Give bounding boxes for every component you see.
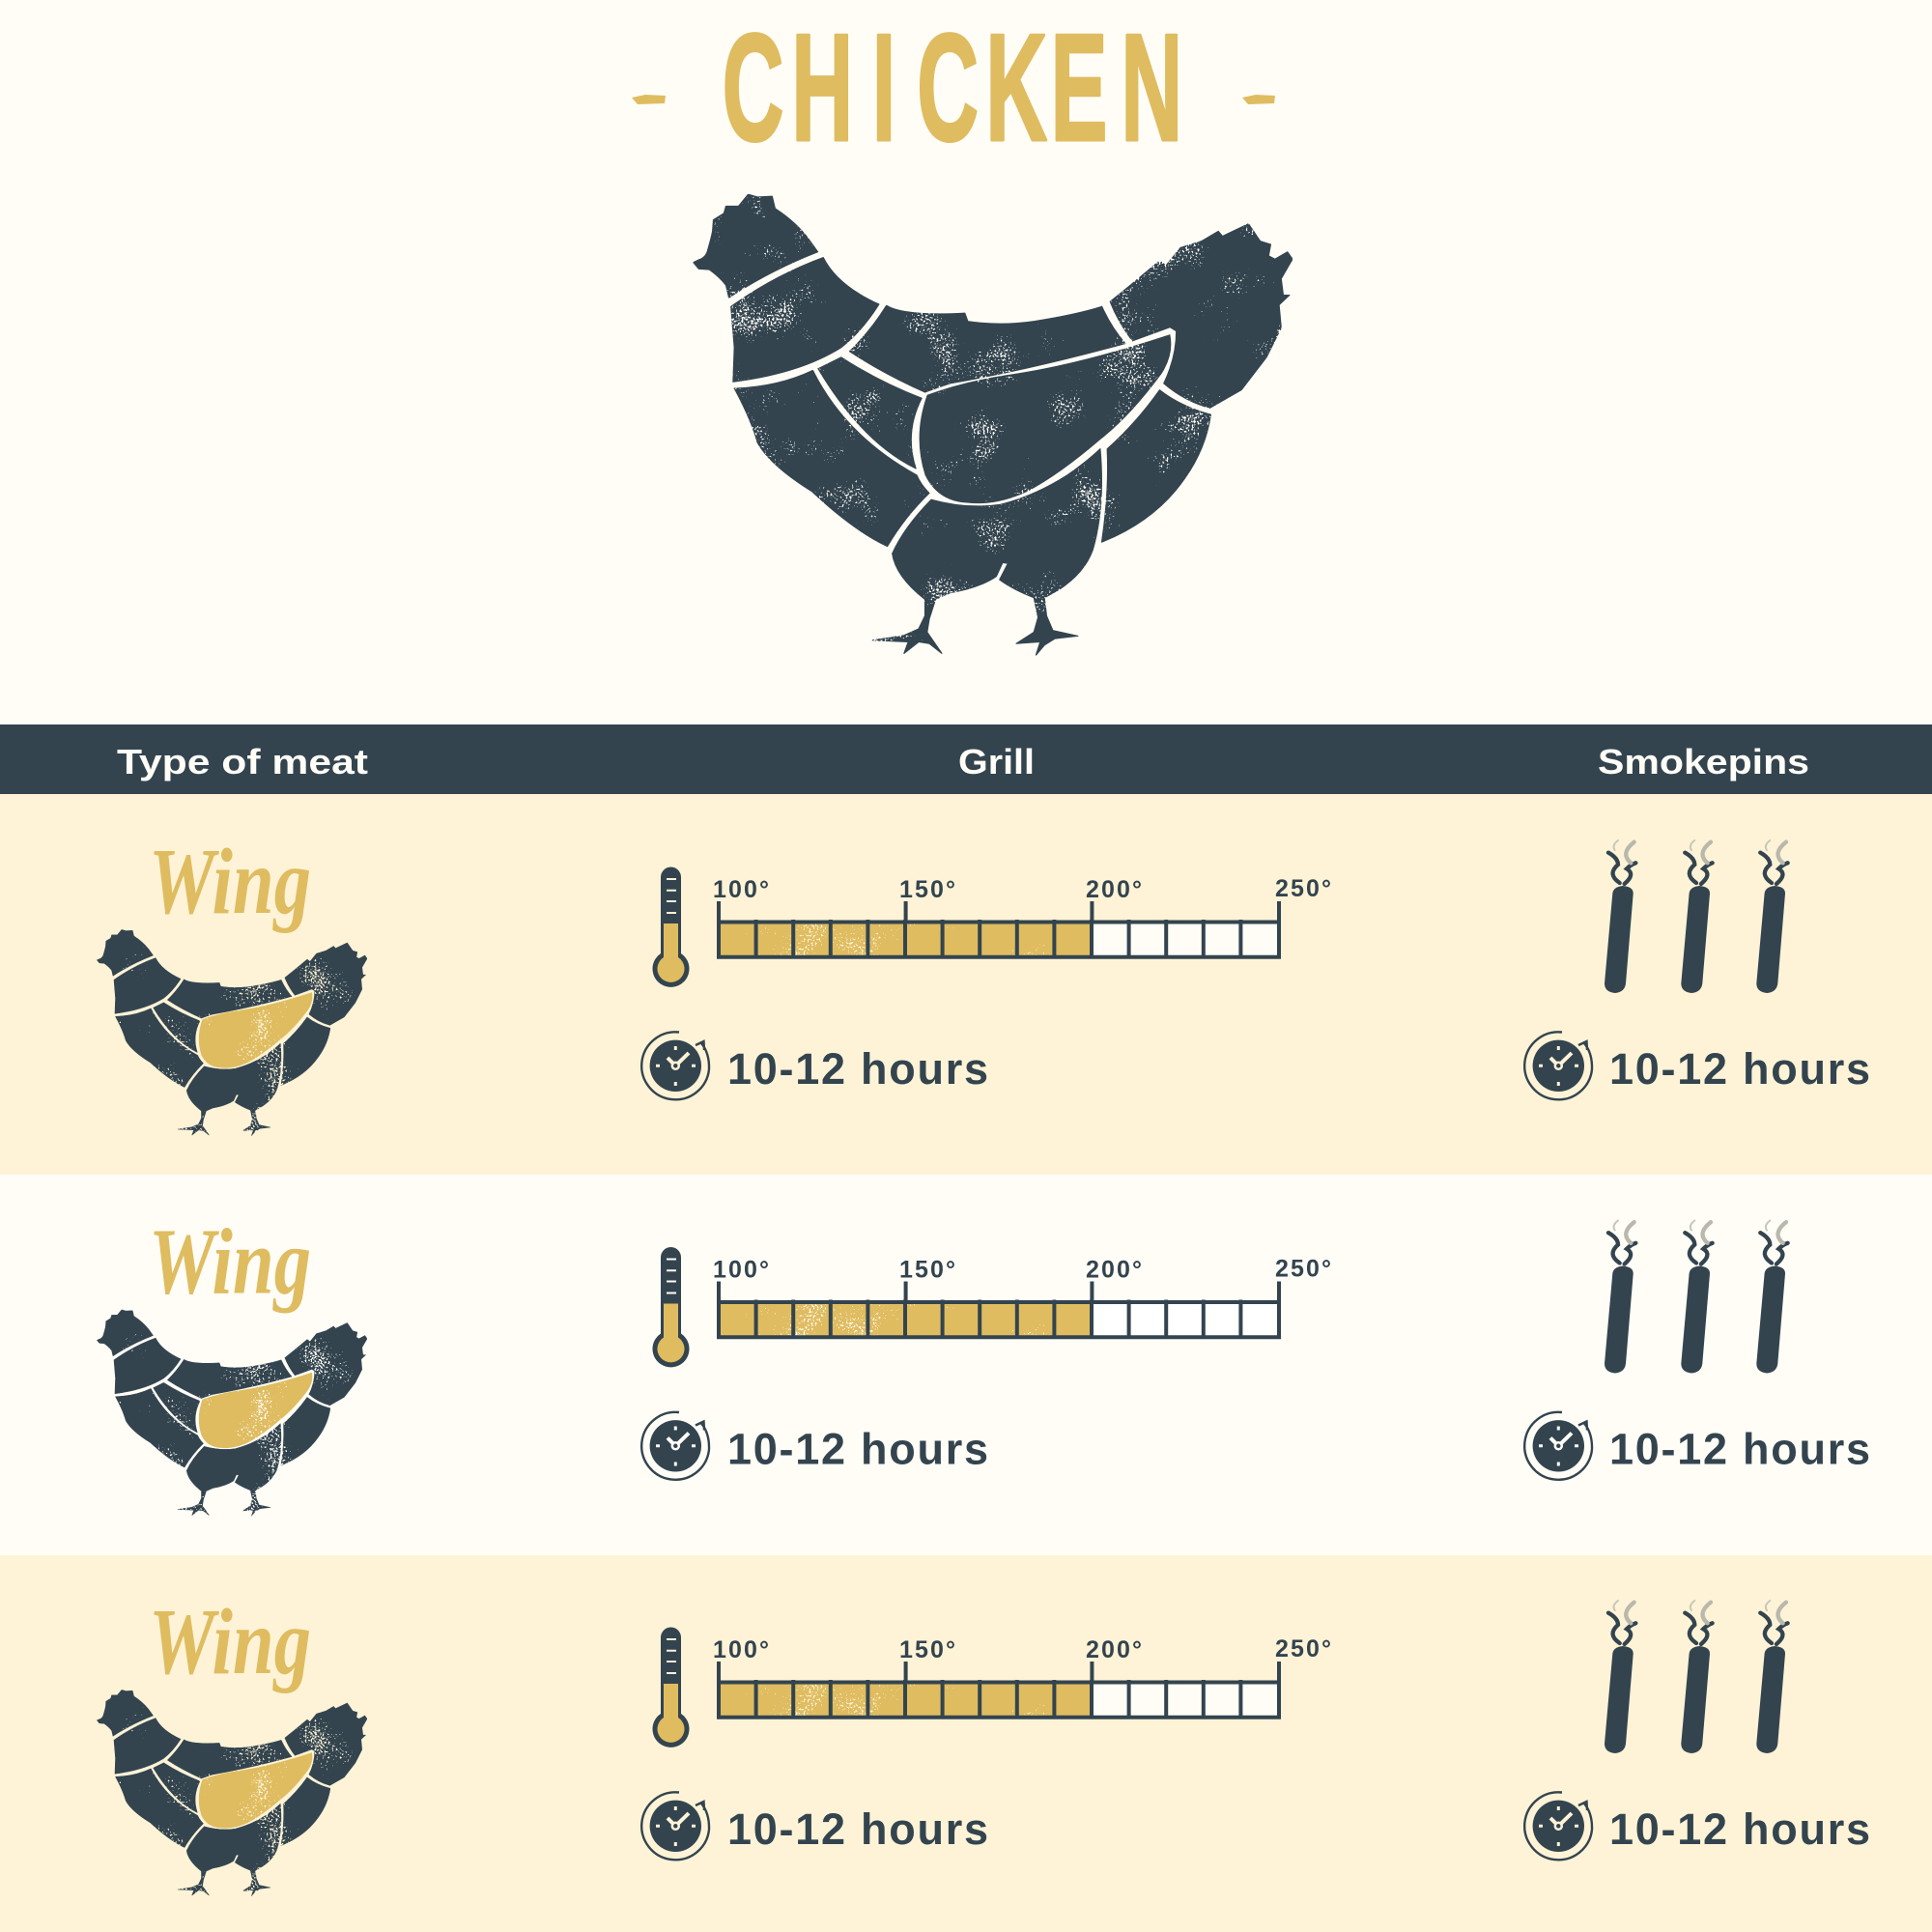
smokepins time: 10-12 hours bbox=[1609, 1804, 1870, 1854]
smokepin 3 bbox=[1756, 1601, 1788, 1753]
chicken with wing highlighted bbox=[97, 1690, 367, 1896]
smokepins time: 10-12 hours bbox=[1609, 1424, 1870, 1474]
chicken with wing highlighted bbox=[97, 1310, 367, 1516]
grill time: 10-12 hours bbox=[727, 1804, 988, 1854]
smokepin 3 bbox=[1756, 840, 1788, 993]
row 2 bbox=[0, 1175, 1932, 1555]
smokepin 1 bbox=[1605, 840, 1635, 993]
grill clock icon bbox=[641, 1412, 709, 1480]
thermometer bbox=[653, 1247, 690, 1367]
smokepin 2 bbox=[1681, 840, 1713, 993]
temperature scale bbox=[713, 1256, 1331, 1337]
scale label 150: 150° bbox=[899, 1256, 955, 1283]
row 3 bbox=[0, 1555, 1932, 1932]
smokepins clock icon bbox=[1524, 1792, 1592, 1860]
grill clock icon bbox=[641, 1792, 709, 1860]
header: type of meat: Type of meat bbox=[117, 742, 368, 781]
header: grill: Grill bbox=[958, 742, 1035, 781]
scale label 100: 100° bbox=[713, 1256, 769, 1283]
chicken with wing highlighted bbox=[97, 929, 367, 1136]
smokepins clock icon bbox=[1524, 1412, 1592, 1480]
row 1 bbox=[0, 794, 1932, 1175]
scale label 200: 200° bbox=[1086, 1636, 1142, 1663]
cut name: Wing bbox=[149, 830, 311, 933]
grill time: 10-12 hours bbox=[727, 1424, 988, 1474]
cut name: Wing bbox=[149, 1209, 311, 1314]
temperature scale bbox=[713, 1635, 1331, 1718]
scale label 250: 250° bbox=[1275, 1256, 1331, 1283]
scale label 200: 200° bbox=[1086, 1256, 1142, 1283]
smokepin 2 bbox=[1681, 1220, 1713, 1374]
temperature scale bbox=[713, 875, 1331, 957]
table header bar bbox=[0, 724, 1932, 794]
title text: CHICKEN bbox=[723, 3, 1182, 174]
main chicken cuts diagram bbox=[694, 194, 1293, 655]
grill clock icon bbox=[641, 1032, 709, 1099]
grill time: 10-12 hours bbox=[727, 1044, 988, 1094]
smokepins clock icon bbox=[1524, 1032, 1592, 1099]
left title dash bbox=[632, 95, 666, 104]
right title dash bbox=[1242, 95, 1275, 104]
thermometer bbox=[653, 867, 690, 987]
scale label 150: 150° bbox=[899, 1636, 955, 1663]
header: smokepins: Smokepins bbox=[1598, 742, 1809, 781]
smokepin 1 bbox=[1605, 1601, 1635, 1753]
cut name: Wing bbox=[149, 1590, 311, 1693]
smokepin 2 bbox=[1681, 1601, 1713, 1753]
smokepins time: 10-12 hours bbox=[1609, 1044, 1870, 1094]
scale label 200: 200° bbox=[1086, 876, 1142, 903]
smokepin 1 bbox=[1605, 1220, 1635, 1374]
scale label 250: 250° bbox=[1275, 875, 1331, 902]
smokepin 3 bbox=[1756, 1220, 1788, 1374]
scale label 100: 100° bbox=[713, 1636, 769, 1663]
thermometer bbox=[653, 1627, 690, 1747]
scale label 150: 150° bbox=[899, 876, 955, 903]
scale label 100: 100° bbox=[713, 876, 769, 903]
scale label 250: 250° bbox=[1275, 1635, 1331, 1662]
title bbox=[632, 3, 1275, 174]
